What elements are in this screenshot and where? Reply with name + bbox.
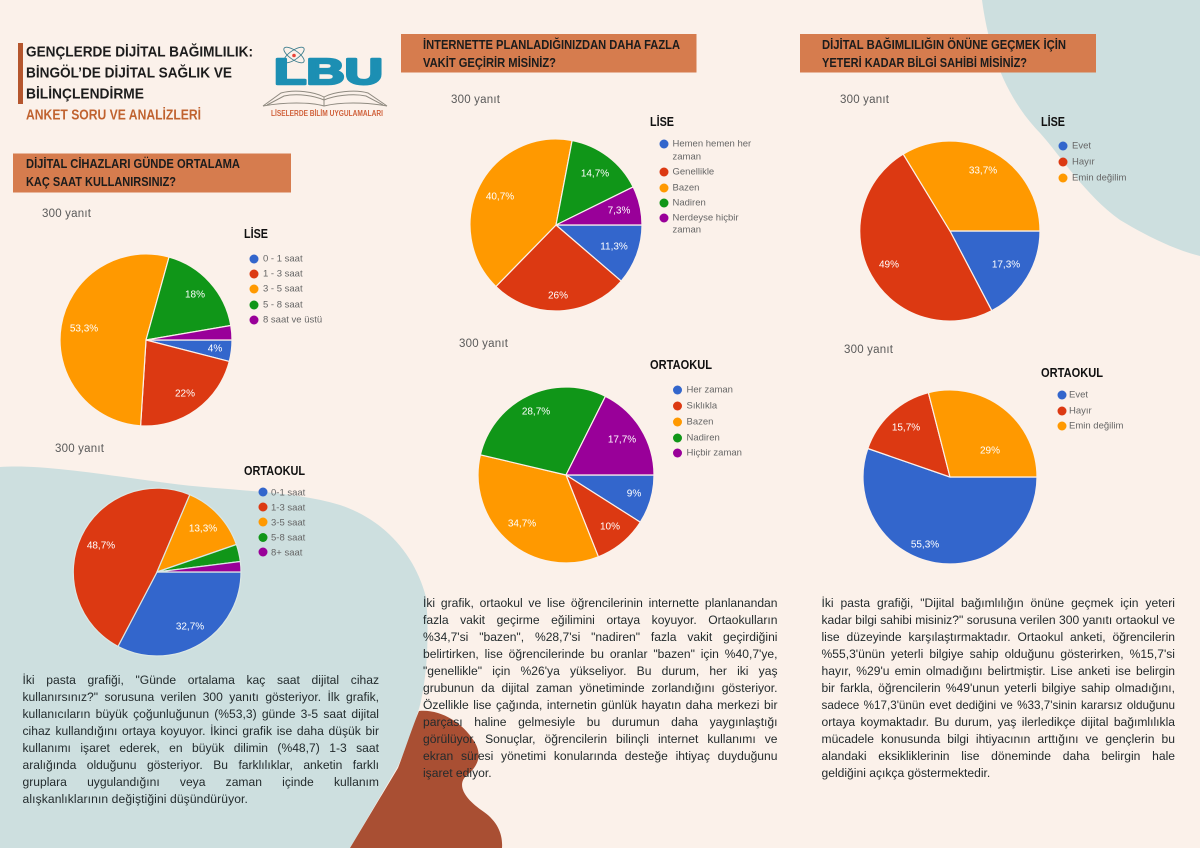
legend: lise hours: [244, 226, 322, 326]
text block: internet analysis: %34,7'si "bazen", %28,7'si "nadiren" fazla vakit geçirdiğini: [423, 630, 778, 644]
text block: hours analysis: cihaz kullandığını ortaya koyuyor. İkinci grafik ise daha düşük bir: [22, 724, 379, 738]
heading: knowledge: [800, 34, 1096, 72]
text block: internet analysis: "genellikle" için %26'ya yükseliyor. Bu durum, her iki yaş: [423, 664, 778, 678]
legend: lise knowledge: Evet: [1072, 140, 1091, 152]
legend: ortaokul knowledge: Emin değilim: [1069, 420, 1123, 432]
legend: lise knowledge: [1041, 114, 1126, 184]
legend: lise hours: 5 - 8 saat: [263, 300, 303, 310]
text block: hours analysis: kullanıcıların büyük çoğunluğunun (%53,3) günde 3-5 saat dijital: [22, 707, 379, 721]
pie chart: ortaokul internet: 9%: [627, 488, 641, 500]
legend: lise internet: Bazen: [672, 182, 699, 194]
legend: lise internet: Nerdeyse hiçbir: [672, 212, 738, 224]
pie chart: ortaokul internet: [478, 387, 654, 563]
text block: knowledge analysis: lise düzeyinde karşılaştırmaktadır. Ortaokul anketi, öğrencilerin: [822, 630, 1175, 644]
legend: ortaokul hours: ORTAOKUL: [244, 464, 305, 478]
text block: internet analysis: ekran süresi yönetimi konularında desteğe ihtiyaç duyduğunu: [423, 749, 778, 763]
text block: knowledge analysis: ortaya koymaktadır. Bu durum, yaş ilerledikçe dijital bağımlılıkla: [822, 715, 1175, 729]
pie chart: ortaokul internet: 34,7%: [508, 518, 536, 530]
pie chart: lise hours: 18%: [185, 290, 205, 300]
pie chart: ortaokul hours: [73, 488, 241, 656]
text block: internet analysis: grubunun da dijital zaman yönetiminde zorlandığını gösteriyor.: [423, 681, 778, 695]
text block: knowledge analysis: İki pasta grafiği, "Dijital bağımlılığın önüne geçmek için yeteri: [822, 596, 1175, 610]
legend: lise hours: 0 - 1 saat: [263, 254, 303, 264]
legend: lise hours: 3 - 5 saat: [263, 284, 303, 294]
title accent bar: [18, 43, 23, 104]
legend: ortaokul internet: ORTAOKUL: [650, 358, 712, 372]
logo letters: LBU: [274, 51, 383, 92]
pie chart: ortaokul hours: 13,3%: [189, 524, 217, 534]
logo caption: LİSELERDE BİLİM UYGULAMALARI: [271, 109, 383, 118]
subtitle: ANKET SORU VE ANALİZLERİ: [26, 106, 201, 124]
heading: internet time: VAKİT GEÇİRİR MİSİNİZ?: [423, 55, 556, 70]
heading: daily device hours: [13, 154, 291, 192]
text block: internet analysis: fazla vakit geçirme eğilimini ortaya koyuyor. Ortaokulların: [423, 613, 778, 627]
pie chart: lise knowledge: 49%: [879, 260, 899, 270]
legend: lise internet: zaman: [672, 224, 701, 236]
legend: lise hours: 1 - 3 saat: [263, 268, 303, 280]
pie chart: ortaokul knowledge: 55,3%: [911, 540, 939, 550]
response count 6: 300 yanıt: [844, 344, 894, 356]
text block: hours analysis: İki pasta grafiği, "Günde ortalama kaç saat dijital cihaz: [22, 672, 379, 686]
pie chart: lise knowledge: 17,3%: [992, 260, 1020, 270]
text block: internet analysis: görülüyor. Sonuçlar, öğrencilerin bilinçli internet kullanımı ve: [423, 732, 778, 746]
pie chart: ortaokul knowledge: 29%: [980, 446, 1000, 456]
response count 1: 300 yanıt: [42, 208, 92, 220]
response count 2: 300 yanıt: [55, 443, 105, 455]
text block: internet analysis: İki grafik, ortaokul ve lise öğrencilerinin internette planlanandan: [423, 596, 778, 610]
pie chart: ortaokul internet: 17,7%: [608, 434, 636, 446]
text block: knowledge analysis: %55,3'ünün yeterli bilgiye sahip olduğunu gösterirken, %15,7'si: [822, 647, 1175, 661]
legend: lise knowledge: Hayır: [1072, 156, 1095, 168]
text block: internet analysis: belirtirken, lise öğrencilerinde bu oranlar "bazen" için %40,7'ye,: [423, 647, 778, 661]
pie chart: lise internet: 11,3%: [600, 242, 628, 252]
pie chart: lise knowledge: 33,7%: [969, 166, 997, 176]
text block: internet analysis: işaret ediyor.: [423, 766, 492, 780]
atom icon: [282, 44, 306, 66]
legend: ortaokul knowledge: [1041, 366, 1123, 432]
text block: knowledge analysis: hayır, %29'u emin olmadığını belirtmiştir. Lise anketi ise belirgin: [822, 664, 1175, 678]
pie chart: lise internet: 26%: [548, 290, 568, 302]
text block: knowledge analysis: kadar bilgi sahibi misiniz?" sorusuna verilen 300 yanıtı ortaokul ve: [822, 613, 1175, 627]
legend: ortaokul hours: 0-1 saat: [271, 488, 306, 498]
legend: ortaokul hours: 5-8 saat: [271, 532, 306, 544]
legend: ortaokul internet: [650, 358, 742, 458]
legend: lise hours: 8 saat ve üstü: [263, 314, 322, 326]
pie chart: ortaokul hours: 48,7%: [87, 540, 115, 552]
title line 2: BİNGÖL’DE DİJİTAL SAĞLIK VE: [26, 64, 232, 82]
text block: knowledge analysis: geldiğini açıkça göstermektedir.: [822, 766, 990, 780]
legend: ortaokul internet: Bazen: [686, 416, 713, 428]
text block: knowledge analysis: alandaki eksikliklerinin lise döneminde daha belirgin hale: [822, 749, 1175, 763]
pie chart: lise hours: 53,3%: [70, 324, 98, 334]
logo: LBU: [263, 44, 387, 118]
text block: hours analysis: [22, 672, 379, 806]
text block: knowledge analysis: sadece %17,3'ünün evet dediğini ve %33,7'sinin kararsız olduğunu: [822, 699, 1175, 712]
legend: ortaokul hours: [244, 464, 306, 558]
heading: internet time: İNTERNETTE PLANLADIĞINIZDAN DAHA FAZLA: [423, 37, 681, 52]
pie chart: lise knowledge: [860, 141, 1040, 321]
legend: lise internet: LİSE: [650, 114, 674, 129]
legend: ortaokul knowledge: ORTAOKUL: [1041, 366, 1103, 380]
pie chart: ortaokul internet: 10%: [600, 522, 620, 532]
response count 5: 300 yanıt: [840, 94, 890, 106]
legend: lise internet: [650, 114, 751, 236]
pie chart: lise internet: [470, 139, 642, 311]
text block: hours analysis: kullanırsınız?" sorusuna verilen 300 yanıtı gösteriyor. İlk grafik,: [22, 690, 379, 704]
heading: internet time: [401, 34, 696, 72]
pie chart: lise internet: 14,7%: [581, 168, 609, 180]
heading: daily device hours: KAÇ SAAT KULLANIRSINIZ?: [26, 174, 176, 189]
legend: lise knowledge: LİSE: [1041, 114, 1065, 129]
heading: knowledge: DİJİTAL BAĞIMLILIĞIN ÖNÜNE GEÇMEK İÇİN: [822, 37, 1066, 52]
background shape: bottom-left teal blob: [0, 466, 428, 848]
pie chart: ortaokul internet: 28,7%: [522, 406, 550, 418]
title line 1: GENÇLERDE DİJİTAL BAĞIMLILIK:: [26, 42, 253, 60]
text block: hours analysis: gruplara uygulandığını veya zaman içinde kullanım: [22, 775, 379, 789]
pie chart: lise hours: 4%: [208, 344, 222, 354]
legend: lise hours: LİSE: [244, 226, 268, 241]
legend: ortaokul knowledge: Evet: [1069, 390, 1088, 400]
background shape: top-right teal blob: [982, 0, 1200, 256]
text block: knowledge analysis: bir farkla, öğrencilerin %49'unun yeterli bilgiye sahip olmadığını,: [822, 681, 1175, 695]
text block: hours analysis: kullanımı işaret ederek, en büyük dilimin (%48,7) 1-3 saat: [22, 741, 379, 755]
legend: lise internet: zaman: [672, 152, 701, 162]
title line 3: BİLİNÇLENDİRME: [26, 86, 144, 102]
response count 3: 300 yanıt: [451, 94, 501, 106]
text block: knowledge analysis: mücadele konusunda bilgi ihtiyacının arttığını ve gençlerin bu: [822, 732, 1175, 746]
heading: daily device hours: DİJİTAL CİHAZLARI GÜNDE ORTALAMA: [26, 156, 241, 171]
heading: knowledge: YETERİ KADAR BİLGİ SAHİBİ MİSİNİZ?: [822, 55, 1027, 70]
text block: internet analysis: [423, 596, 778, 780]
background shape: bottom brown blob: [350, 711, 502, 848]
pie chart: lise internet: 7,3%: [608, 206, 631, 216]
legend: lise internet: Genellikle: [672, 166, 714, 178]
pie chart: lise hours: 22%: [175, 388, 195, 400]
legend: ortaokul hours: 3-5 saat: [271, 518, 306, 528]
pie chart: lise hours: [60, 254, 232, 426]
title block: [18, 42, 253, 124]
pie chart: ortaokul hours: 32,7%: [176, 622, 204, 632]
text block: knowledge analysis: [822, 596, 1175, 780]
text block: internet analysis: Özellikle lise çağında, internetin günlük hayatın daha merkezi bir: [423, 698, 778, 712]
pie chart: ortaokul knowledge: [863, 390, 1037, 564]
legend: lise knowledge: Emin değilim: [1072, 172, 1126, 184]
pie chart: ortaokul knowledge: 15,7%: [892, 422, 920, 434]
legend: ortaokul knowledge: Hayır: [1069, 406, 1092, 416]
text block: hours analysis: aralığında olduğunu gösteriyor. Bu farklılıklar, anketin farklı: [22, 758, 379, 772]
text block: internet analysis: parçası haline gelmesiyle bu durumun daha yaygınlaştığı: [423, 715, 778, 729]
pie chart: lise internet: 40,7%: [486, 192, 514, 202]
open book: [263, 91, 387, 106]
legend: ortaokul hours: 1-3 saat: [271, 502, 306, 514]
legend: ortaokul internet: Nadiren: [686, 432, 720, 444]
legend: ortaokul internet: Her zaman: [686, 384, 733, 396]
legend: ortaokul internet: Sıklıkla: [686, 400, 718, 412]
legend: lise internet: Nadiren: [672, 198, 706, 208]
response count 4: 300 yanıt: [459, 338, 509, 350]
legend: ortaokul internet: Hiçbir zaman: [686, 448, 742, 458]
legend: ortaokul hours: 8+ saat: [271, 548, 303, 558]
text block: hours analysis: alışkanlıklarının değiştiğini düşündürüyor.: [22, 792, 248, 806]
legend: lise internet: Hemen hemen her: [672, 138, 751, 150]
